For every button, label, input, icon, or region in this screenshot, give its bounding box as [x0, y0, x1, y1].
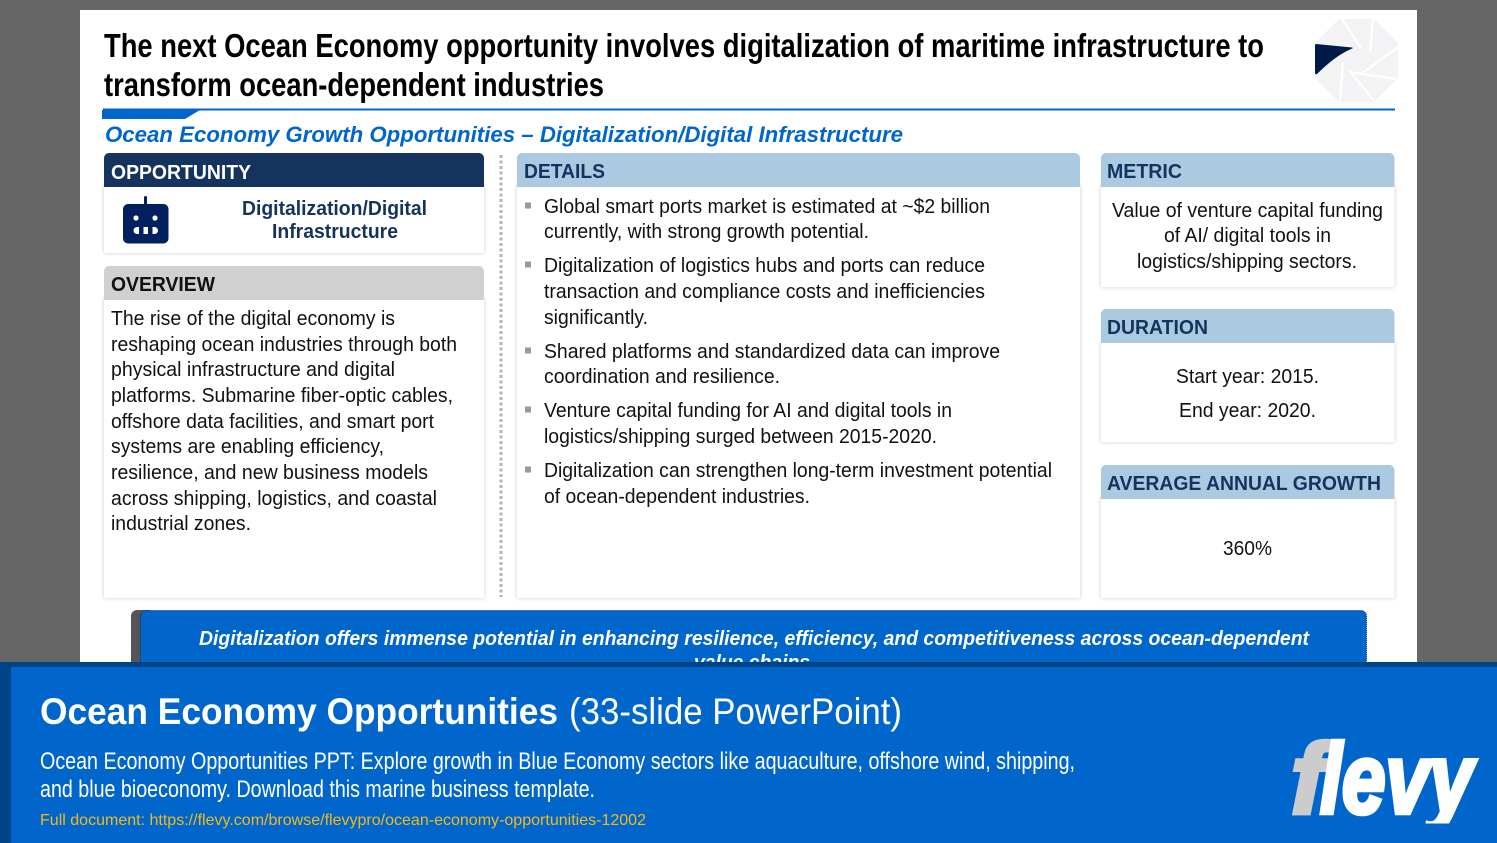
- panel: overview: [104, 266, 484, 598]
- bullet list: logistics/shipping surged between 2015-2020.: [544, 426, 937, 448]
- heading: details: [517, 153, 1080, 187]
- bullet list: coordination and resilience.: [544, 366, 780, 388]
- panel: duration: [1101, 309, 1394, 442]
- overview text: platforms. Submarine fiber-optic cables,: [111, 385, 453, 407]
- footer title: (33-slide PowerPoint): [569, 691, 902, 732]
- overview text: systems are enabling efficiency,: [111, 436, 384, 458]
- bullet list: Venture capital funding for AI and digital tools in: [544, 400, 952, 422]
- heading: metric: METRIC: [1107, 161, 1182, 183]
- heading: duration: [1101, 309, 1394, 343]
- overview text: across shipping, logistics, and coastal: [111, 488, 437, 510]
- bullet list: Digitalization of logistics hubs and ports can reduce: [544, 255, 985, 277]
- metric text: of AI/ digital tools in: [1164, 225, 1331, 247]
- metric text: [1112, 200, 1383, 273]
- opportunity name: Digitalization/Digital: [242, 198, 427, 220]
- growth value: 360%: [1223, 538, 1272, 560]
- callout banner: Digitalization offers immense potential in enhancing resilience, efficiency, and competitiveness across ocean-dependent: [199, 628, 1310, 650]
- heading: average annual growth: [1101, 465, 1394, 499]
- duration text: [1176, 366, 1319, 422]
- opportunity name: [242, 198, 427, 243]
- bullet list: currently, with strong growth potential.: [544, 221, 869, 243]
- footer title: [40, 691, 902, 732]
- title rule: [102, 108, 1395, 119]
- overview text: resilience, and new business models: [111, 462, 428, 484]
- heading: duration: DURATION: [1107, 317, 1208, 339]
- footer description: [40, 748, 1075, 803]
- icon: navy aperture blade: [1315, 44, 1353, 74]
- heading: details: DETAILS: [524, 161, 605, 183]
- bullet list: transaction and compliance costs and inefficiencies: [544, 281, 985, 303]
- callout banner: [131, 610, 1366, 674]
- overview text: reshaping ocean industries through both: [111, 334, 457, 356]
- panel: details: [517, 153, 1080, 598]
- duration text: End year: 2020.: [1179, 400, 1316, 422]
- slide: [80, 10, 1417, 674]
- title: The next Ocean Economy opportunity involves digitalization of maritime infrastructure to: [104, 27, 1264, 64]
- bullet list: [525, 196, 1052, 508]
- heading: overview: OVERVIEW: [111, 274, 215, 296]
- flevy logo: f: [1291, 723, 1334, 834]
- callout banner: value chains: [694, 652, 810, 674]
- heading: opportunity: [104, 153, 484, 187]
- bullet list: Shared platforms and standardized data can improve: [544, 341, 1000, 363]
- bullet list: Global smart ports market is estimated at ~$2 billion: [544, 196, 990, 218]
- overview text: offshore data facilities, and smart port: [111, 411, 434, 433]
- heading: opportunity: OPPORTUNITY: [111, 162, 252, 184]
- panel: average annual growth: [1101, 465, 1394, 598]
- panel: metric: [1101, 153, 1394, 287]
- overview text: The rise of the digital economy is: [111, 308, 395, 330]
- heading: overview: [104, 266, 484, 300]
- footer link: Full document: https://flevy.com/browse/flevypro/ocean-economy-opportunities-12002: [40, 812, 646, 829]
- title: [104, 27, 1264, 103]
- icon: robot: [123, 196, 168, 244]
- footer band: [0, 662, 1497, 843]
- subtitle: Ocean Economy Growth Opportunities – Digitalization/Digital Infrastructure: [105, 122, 903, 147]
- icon: aperture logo: [1315, 19, 1398, 102]
- heading: metric: [1101, 153, 1394, 187]
- overview text: [111, 308, 457, 535]
- footer description: and blue bioeconomy. Download this marine business template.: [40, 776, 595, 803]
- footer description: Ocean Economy Opportunities PPT: Explore growth in Blue Economy sectors like aquaculture, offshore wind, shipping,: [40, 748, 1075, 775]
- bullet list: Digitalization can strengthen long-term investment potential: [544, 460, 1052, 482]
- footer title: Ocean Economy Opportunities: [40, 691, 558, 732]
- title: transform ocean-dependent industries: [104, 66, 604, 103]
- duration text: Start year: 2015.: [1176, 366, 1319, 388]
- metric text: Value of venture capital funding: [1112, 200, 1383, 222]
- overview text: industrial zones.: [111, 513, 251, 535]
- bullet list: significantly.: [544, 307, 648, 329]
- metric text: logistics/shipping sectors.: [1137, 251, 1357, 273]
- opportunity name: Infrastructure: [272, 221, 398, 243]
- overview text: physical infrastructure and digital: [111, 359, 395, 381]
- panel: opportunity: [104, 153, 484, 253]
- flevy logo: [1292, 738, 1480, 824]
- heading: average annual growth: AVERAGE ANNUAL GROWTH: [1107, 473, 1381, 495]
- bullet list: of ocean-dependent industries.: [544, 486, 810, 508]
